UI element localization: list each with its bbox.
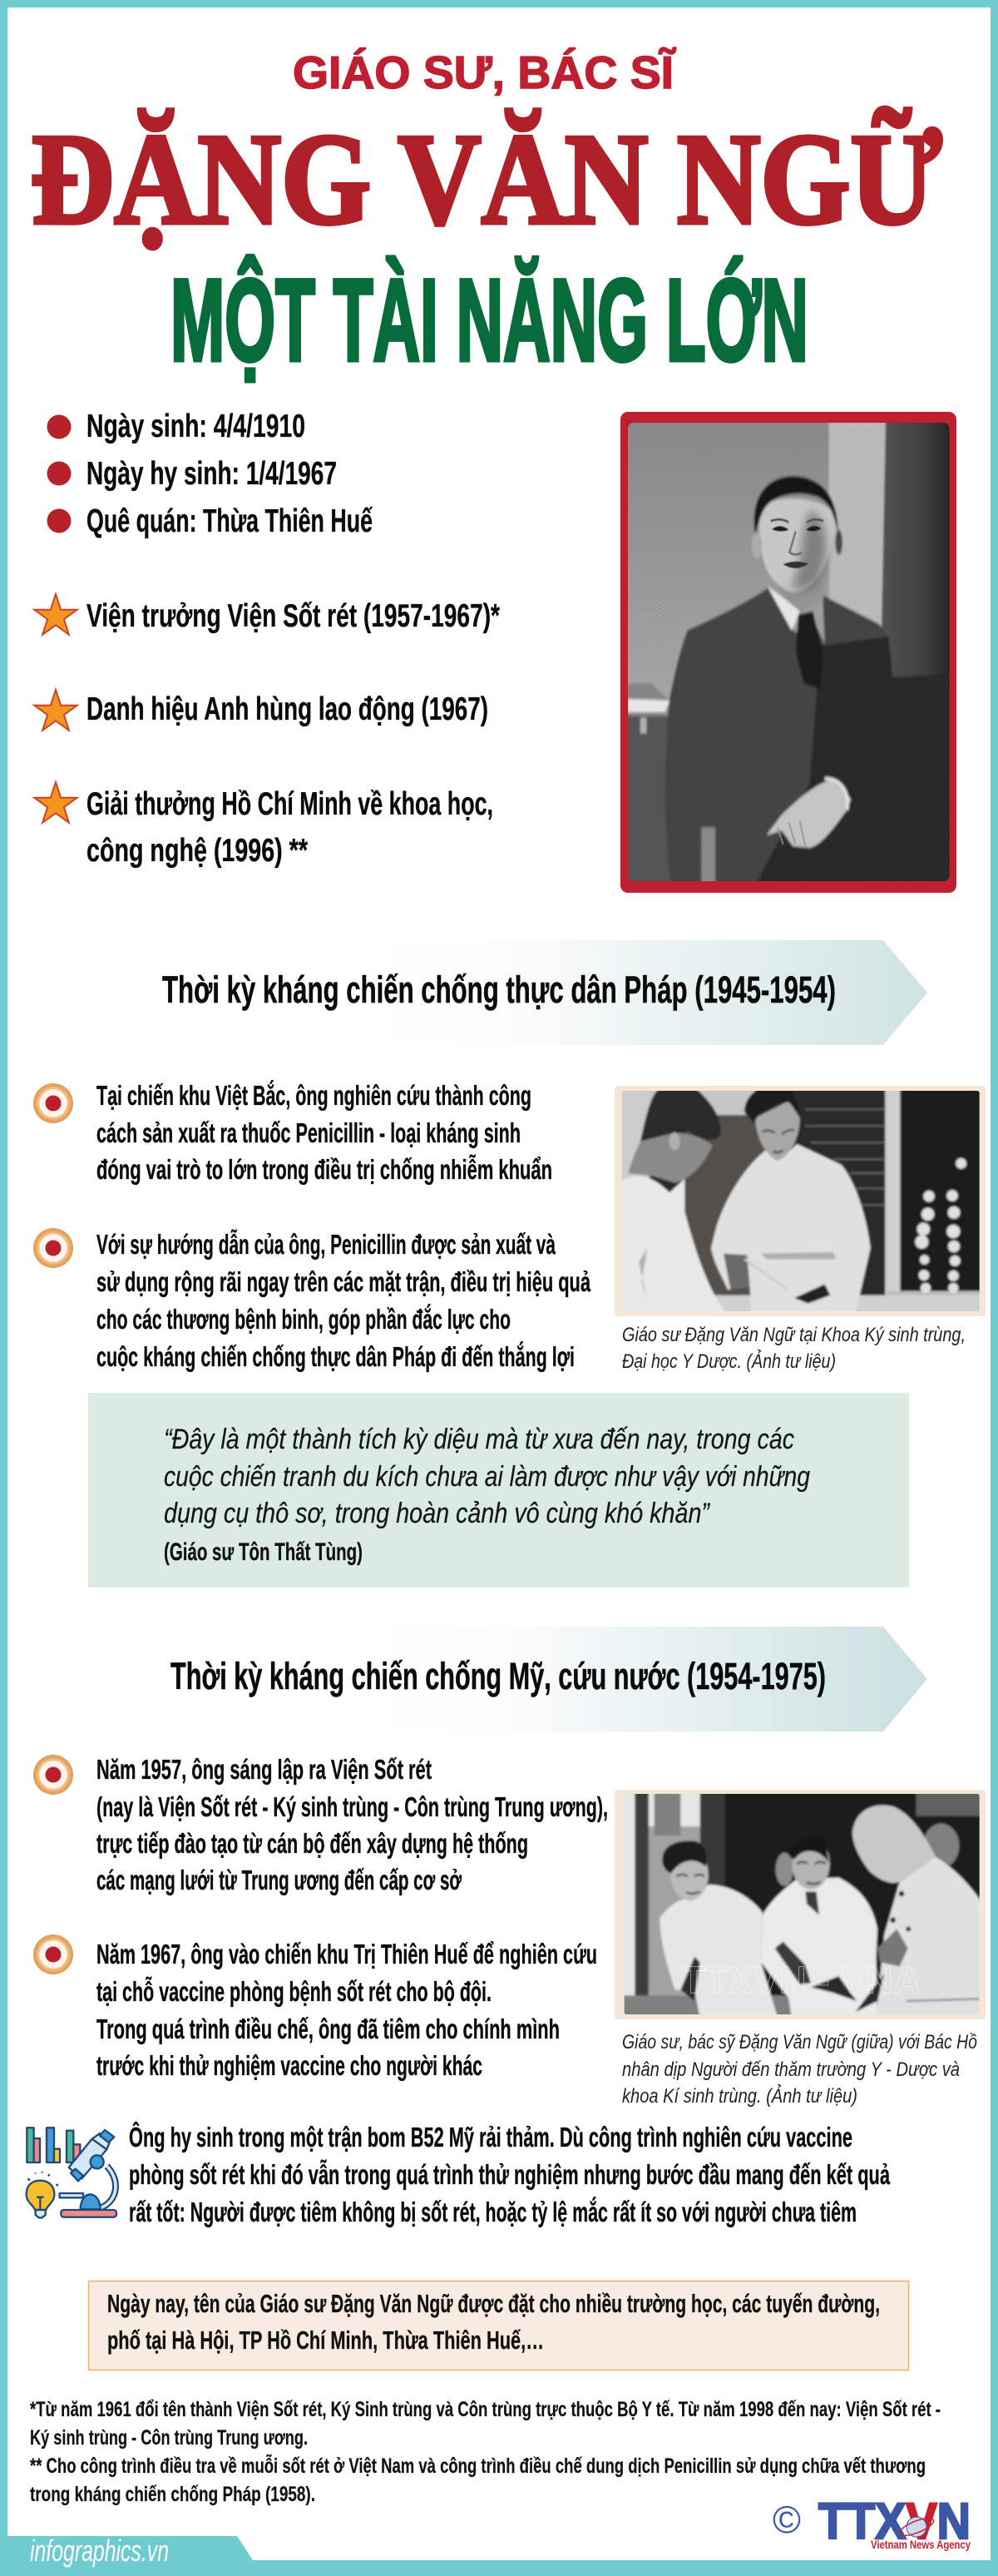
- footer tab: [7, 2534, 253, 2568]
- quote text: dụng cụ thô sơ, trong hoàn cảnh vô cùng khó khăn”: [164, 1498, 710, 1529]
- personal facts list: [47, 409, 373, 539]
- section banner: French war: [162, 940, 927, 1045]
- footnotes: Ký sinh trùng - Côn trùng Trung ương.: [30, 2426, 308, 2450]
- paragraph: sacrifice and vaccine result: [129, 2121, 890, 2227]
- portrait: [624, 417, 954, 887]
- paragraph: founding the institute: Năm 1957, ông sáng lập ra Viện Sốt rét: [96, 1754, 432, 1785]
- paragraph: vaccine research: tại chỗ vaccine phòng bệnh sốt rét cho bộ đội.: [96, 1976, 492, 2007]
- paragraph: penicillin use: Với sự hướng dẫn của ông, Penicillin được sản xuất và: [96, 1229, 556, 1260]
- death date: Ngày hy sinh: 1/4/1967: [86, 456, 337, 492]
- paragraph: founding the institute: [96, 1754, 608, 1895]
- bullet: birth date: [47, 414, 72, 439]
- American war text items: [33, 1754, 608, 2081]
- achievements list: [34, 594, 501, 869]
- icon: target bullet: [33, 1755, 73, 1795]
- agency tagline: Vietnam News Agency: [871, 2538, 971, 2551]
- title block: [31, 47, 942, 385]
- quote text: cuộc chiến tranh du kích chưa ai làm được như vậy với những: [164, 1461, 810, 1493]
- icon: target bullet: [33, 1228, 73, 1268]
- paragraph: vaccine research: [96, 1939, 597, 2081]
- paragraph: penicillin use: [96, 1229, 590, 1372]
- icon: star: [34, 594, 77, 635]
- photo caption: khoa Kí sinh trùng. (Ảnh tư liệu): [622, 2083, 857, 2108]
- photo caption: [622, 1324, 966, 1373]
- lab photo 1 with caption: [615, 1086, 986, 1373]
- French war text items: [33, 1080, 590, 1372]
- photo caption: [622, 2031, 977, 2108]
- paragraph: penicillin research: đóng vai trò to lớn trong điều trị chống nhiễm khuẩn: [96, 1154, 552, 1185]
- globe mark: [897, 2514, 936, 2539]
- quote background: [88, 1393, 909, 1588]
- callout text: phố tại Hà Hội, TP Hồ Chí Minh, Thừa Thiên Huế,…: [107, 2326, 544, 2355]
- TTXVN logo: [773, 2493, 971, 2551]
- portrait photo with red frame: [620, 412, 956, 893]
- paragraph: vaccine research: Năm 1967, ông vào chiến khu Trị Thiên Huế để nghiên cứu: [96, 1939, 597, 1969]
- bullet: death date: [47, 461, 72, 486]
- achievement: director: Viện trưởng Viện Sốt rét (1957-1967)*: [86, 598, 501, 634]
- achievement: Ho Chi Minh prize: công nghệ (1996) **: [86, 833, 309, 869]
- paragraph: penicillin use: cho các thương bệnh binh, góp phần đắc lực cho: [96, 1304, 511, 1335]
- paragraph: vaccine research: Trong quá trình điều chế, ông đã tiêm cho chính mình: [96, 2014, 560, 2044]
- bullet: hometown: [47, 509, 72, 533]
- agency wordmark: TTXVN: [818, 2493, 971, 2549]
- copyright mark: ©: [773, 2498, 801, 2541]
- lab photo: [617, 1087, 983, 1315]
- paragraph: penicillin research: [96, 1080, 552, 1185]
- section banner: American war: [170, 1627, 927, 1731]
- icon: star: [34, 782, 77, 823]
- quote text: “Đây là một thành tích kỳ diệu mà từ xưa đến nay, trong các: [164, 1424, 794, 1455]
- footnotes: trong kháng chiến chống Pháp (1958).: [30, 2483, 315, 2506]
- title line: professor: GIÁO SƯ, BÁC SĨ: [293, 47, 677, 98]
- legacy callout: [88, 2281, 908, 2370]
- birth date: Ngày sinh: 4/4/1910: [86, 409, 305, 444]
- quote attribution: (Giáo sư Tôn Thất Tùng): [164, 1538, 363, 1566]
- achievement: labour hero: Danh hiệu Anh hùng lao động (1967): [86, 691, 488, 727]
- arrow banner: [366, 1627, 927, 1731]
- paragraph: founding the institute: trực tiếp đào tạo từ cán bộ đến xây dựng hệ thống: [96, 1828, 528, 1859]
- callout box: [88, 2281, 908, 2370]
- photo with Uncle Ho: [617, 1791, 986, 2018]
- photo caption: Đại học Y Dược. (Ảnh tư liệu): [622, 1349, 836, 1373]
- achievement: Ho Chi Minh prize: Giải thưởng Hồ Chí Minh về khoa học,: [86, 786, 493, 822]
- red frame: [620, 412, 956, 893]
- icon: star: [34, 690, 77, 731]
- lab photo 2 with caption: [615, 1790, 986, 2108]
- icon: science microscope, charts and bulb: [27, 2128, 116, 2217]
- paragraph: founding the institute: (nay là Viện Sốt rét - Ký sinh trùng - Côn trùng Trung ương),: [96, 1791, 608, 1822]
- paragraph: penicillin use: sử dụng rộng rãi ngay trên các mặt trận, điều trị hiệu quả: [96, 1266, 590, 1297]
- icon: target bullet: [33, 1083, 73, 1123]
- paragraph: vaccine research: trước khi thử nghiệm vaccine cho người khác: [96, 2050, 482, 2081]
- photo frame: [615, 1790, 986, 2019]
- arrow banner: [366, 940, 927, 1045]
- photo watermark: TTXVN - VNA: [682, 1959, 921, 2002]
- website label: infographics.vn: [30, 2534, 169, 2568]
- paragraph: founding the institute: các mạng lưới từ Trung ương đến cấp cơ sở: [96, 1865, 462, 1895]
- paragraph: penicillin research: Tại chiến khu Việt Bắc, ông nghiên cứu thành công: [96, 1080, 531, 1111]
- paragraph: penicillin use: cuộc kháng chiến chống thực dân Pháp đi đến thắng lợi: [96, 1341, 575, 1372]
- paragraph: penicillin research: cách sản xuất ra thuốc Penicillin - loại kháng sinh: [96, 1117, 521, 1148]
- achievement: Ho Chi Minh prize: [86, 786, 493, 869]
- teal tab shape: [7, 2536, 253, 2560]
- quote panel: [88, 1393, 909, 1588]
- icon: target bullet: [33, 1934, 73, 1974]
- photo frame: [615, 1086, 986, 1316]
- quote text: [164, 1424, 810, 1529]
- footnotes: [30, 2398, 941, 2506]
- hometown: Quê quán: Thừa Thiên Huế: [86, 503, 373, 539]
- callout text: [107, 2289, 880, 2355]
